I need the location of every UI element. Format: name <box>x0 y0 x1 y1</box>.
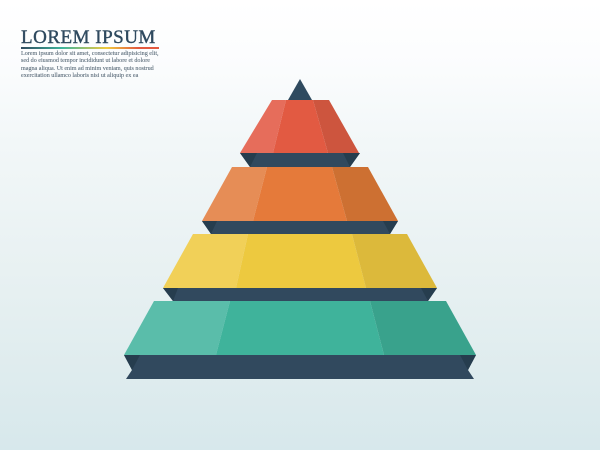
pyramid apex <box>288 79 312 100</box>
text block: magna aliqua. Ut enim ad minim veniam, quis nostrud <box>21 66 154 72</box>
tier 2: orange <box>202 167 398 234</box>
text block: exercitation ullamco laboris nisi ut aliquip ex ea <box>21 73 138 79</box>
title underline <box>21 47 159 49</box>
tier 3: yellow <box>163 234 437 301</box>
tier 1: red <box>240 100 360 167</box>
text block: Lorem ipsum dolor sit amet, consectetur adipisicing elit, <box>21 51 159 57</box>
text block: sed do eiusmod tempor incididunt ut labore et dolore <box>21 58 150 64</box>
text block <box>21 50 159 79</box>
title: LOREM IPSUM <box>21 27 156 48</box>
tier 4: teal <box>124 301 476 379</box>
